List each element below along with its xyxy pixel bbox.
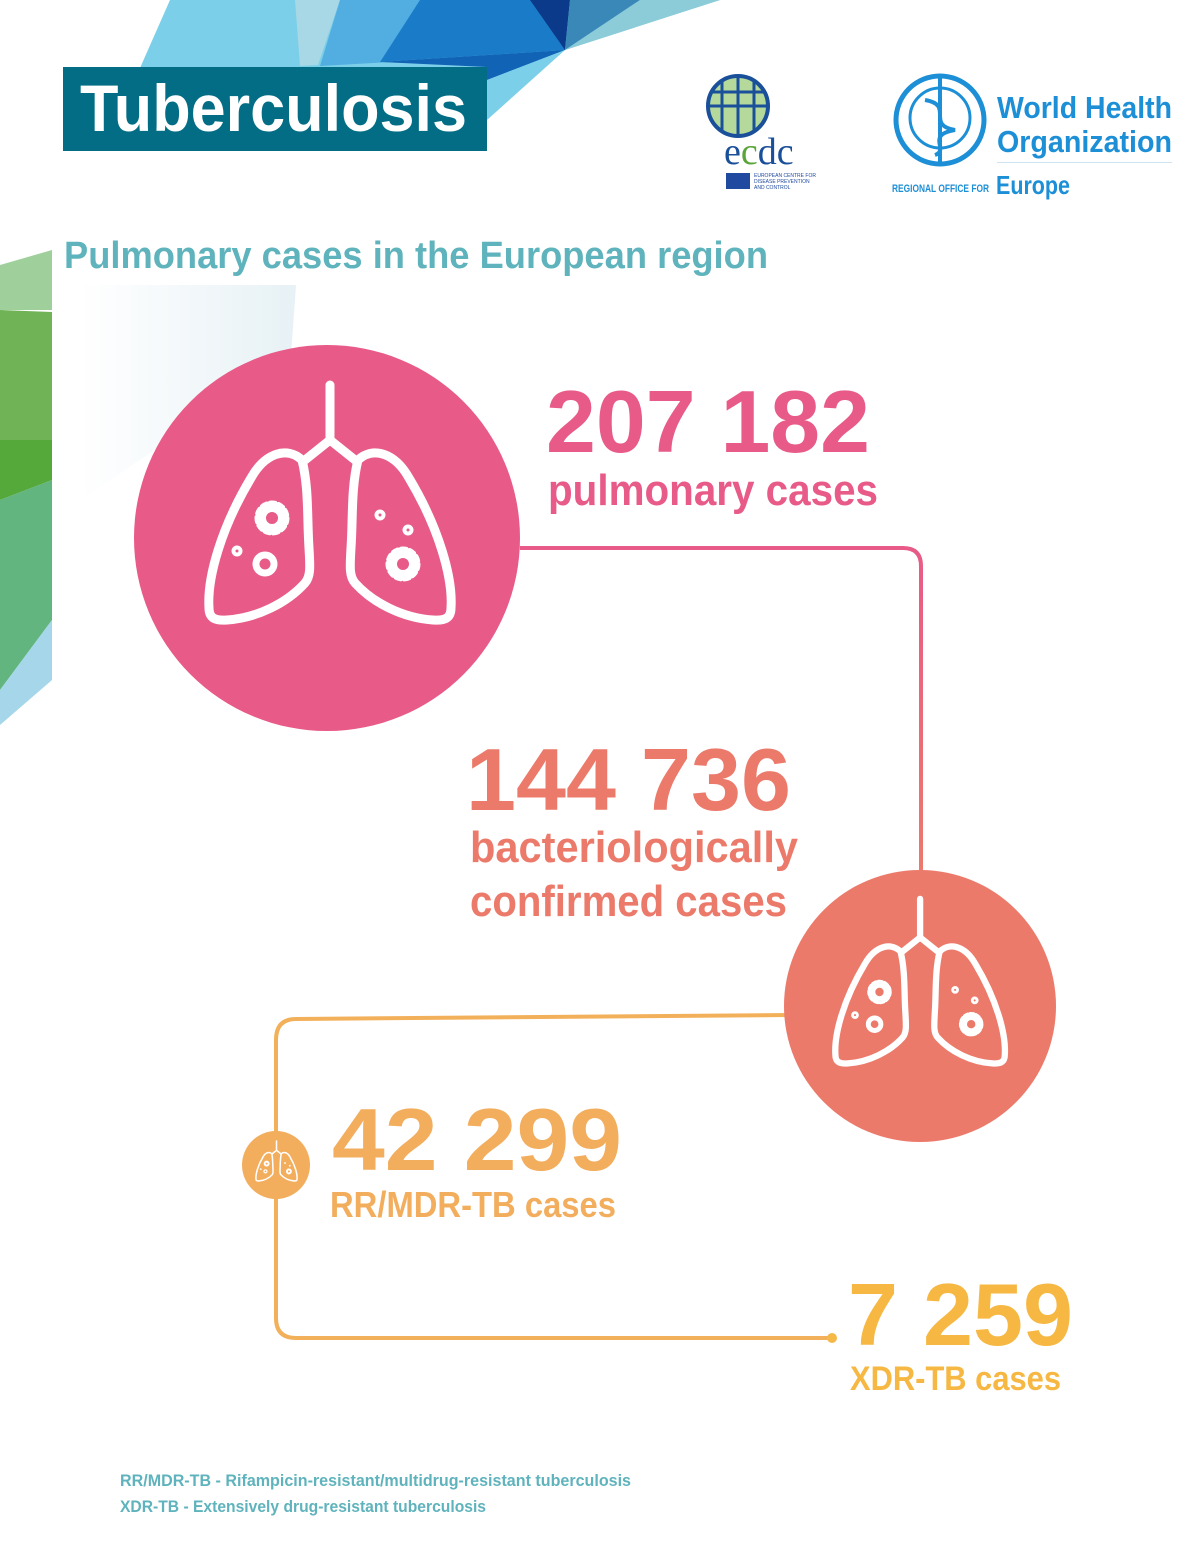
connector: confirmed to RR/MDR and XDR bbox=[276, 1015, 832, 1338]
stat: RR/MDR-TB: 42 299 bbox=[332, 1090, 622, 1189]
stat: pulmonary cases bbox=[546, 372, 878, 515]
stat: bacteriologically confirmed: confirmed cases bbox=[470, 877, 787, 926]
footnotes: XDR-TB - Extensively drug-resistant tuberculosis bbox=[120, 1497, 486, 1516]
logo: ECDC: ecdc bbox=[724, 131, 794, 173]
stat: bacteriologically confirmed: bacteriologically bbox=[470, 823, 798, 872]
stat: bacteriologically confirmed: 144 736 bbox=[466, 730, 791, 829]
stat: pulmonary cases: 207 182 bbox=[546, 372, 870, 471]
logo: ECDC: AND CONTROL bbox=[754, 185, 791, 191]
logo: ECDC bbox=[708, 76, 816, 191]
logo: WHO Europe: Organization bbox=[997, 124, 1172, 159]
logo: WHO Europe: REGIONAL OFFICE FOR bbox=[892, 183, 989, 195]
icon: salmon lungs circle bbox=[784, 870, 1056, 1142]
icon: large pink lungs circle bbox=[134, 345, 520, 731]
footnotes: RR/MDR-TB - Rifampicin-resistant/multidrug-resistant tuberculosis bbox=[120, 1471, 631, 1490]
icon: small orange lungs circle bbox=[242, 1131, 310, 1199]
title: Tuberculosis bbox=[80, 71, 467, 145]
footnotes bbox=[120, 1471, 631, 1516]
stat: pulmonary cases: pulmonary cases bbox=[548, 466, 878, 515]
logo: WHO Europe: Europe bbox=[996, 170, 1070, 200]
connector: pulmonary to confirmed bbox=[520, 548, 921, 880]
decorative left green stripes bbox=[0, 250, 52, 725]
logo: WHO Europe: World Health bbox=[997, 90, 1172, 125]
decorative faint background shape bbox=[80, 285, 296, 500]
stat: XDR-TB: 7 259 bbox=[848, 1265, 1073, 1364]
stat: bacteriologically confirmed bbox=[466, 730, 798, 926]
stat: XDR-TB: XDR-TB cases bbox=[850, 1360, 1061, 1398]
subtitle: Pulmonary cases in the European region bbox=[64, 235, 768, 277]
logo: WHO Europe bbox=[892, 76, 1172, 200]
decorative top banner triangles bbox=[140, 0, 720, 120]
logo: ECDC: EUROPEAN CENTRE FOR bbox=[754, 173, 816, 179]
logo: ECDC: DISEASE PREVENTION bbox=[754, 179, 810, 185]
stat: RR/MDR-TB: RR/MDR-TB cases bbox=[330, 1184, 616, 1225]
icon: tiny end node bbox=[827, 1333, 837, 1343]
stat: RR/MDR-TB bbox=[330, 1090, 622, 1225]
